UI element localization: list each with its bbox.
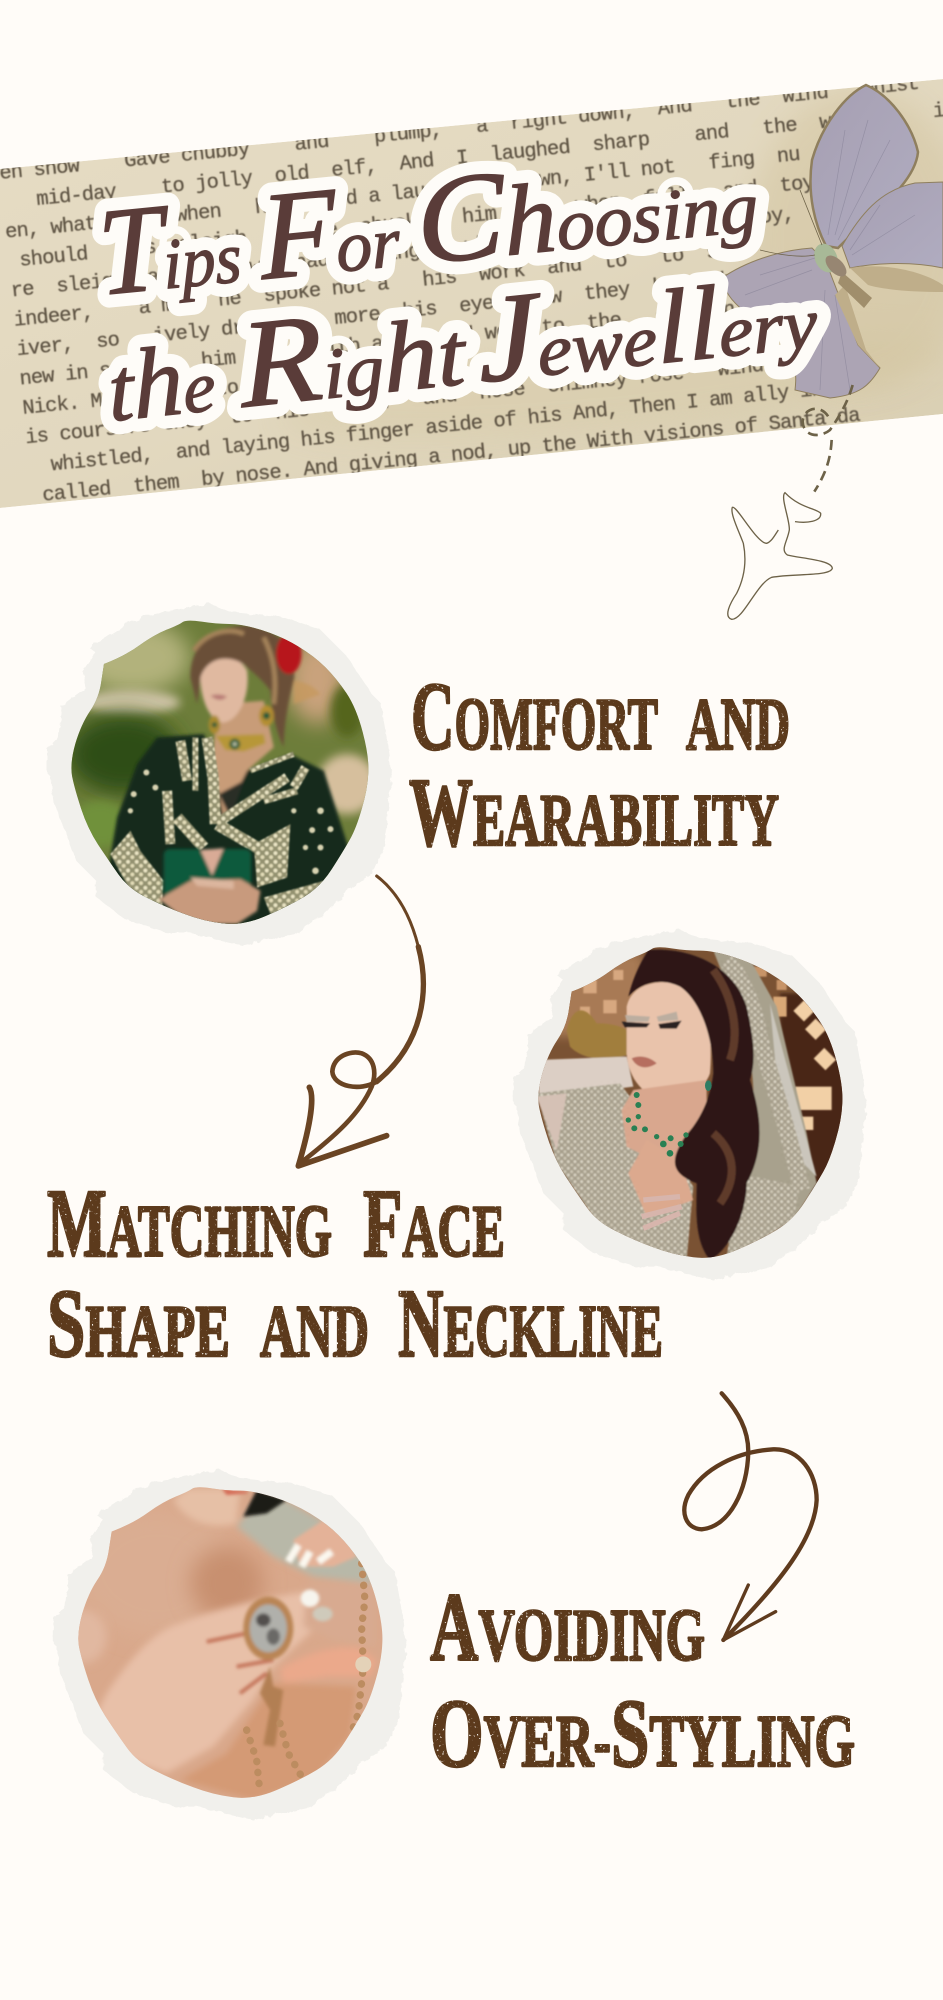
title white sticker halo [95, 120, 820, 449]
typewriter text on paper: en, what to when him, and a laugh of brown, I'll not fing nu the [4, 138, 858, 245]
heading line 2 [47, 1270, 663, 1378]
title lettering: Choosing [413, 120, 760, 292]
icon: butterfly [722, 85, 943, 398]
heading line 1: FACE [363, 1170, 505, 1278]
heading: matching face shape and neckline [47, 1170, 663, 1378]
heading line 2: SHAPE [47, 1270, 230, 1378]
title white sticker halo: Jewellery [474, 237, 820, 410]
typewriter text on paper: called them by nose. And giving a nod, up the With visions of Santa da [30, 405, 861, 509]
typewriter text on paper: should his sleigh of he chuckle him to when fill and toy, [7, 171, 826, 274]
title white sticker halo: Right [235, 273, 470, 435]
typewriter text on paper: is coursers they to his flew and nose chimney rose wind ly [24, 350, 810, 450]
heading line 2: AND [260, 1291, 369, 1373]
typewriter text on paper: new in s he him dry with a x, And went to the ally in [19, 298, 736, 391]
typewriter text on paper: en snow Gave chubby and plump, a right down, And the wind whist [0, 73, 920, 186]
title lettering: Right [235, 273, 470, 435]
panel: avoiding over-styling [40, 1460, 855, 1830]
typewriter text on paper: iver, so ively dre his more his eyes how they ke a by [16, 268, 745, 362]
banner: vintage typewriter paper strip [0, 69, 943, 509]
arrow: from comfort to face shape [298, 876, 423, 1166]
title white sticker halo: Tips [95, 171, 244, 323]
title white sticker halo: Choosing [413, 120, 760, 292]
title lettering: For [256, 155, 403, 307]
title lettering: Tips [95, 171, 244, 323]
heading line 1: AVOIDING [430, 1574, 705, 1682]
photo: bride with emerald necklace [512, 928, 868, 1280]
typewriter text on paper: mid-day to jolly old elf, And I laughed sharp and the wings ies [1, 98, 943, 215]
title lettering: Jewellery [474, 237, 820, 410]
panel: comfort and wearability [30, 591, 790, 961]
photo: woman in green with gold choker [46, 602, 393, 946]
heading: avoiding over-styling [430, 1574, 855, 1788]
heading line 1: COMFORT [411, 663, 658, 771]
arrow: from face shape to over-styling [684, 1393, 817, 1640]
typewriter text on paper [0, 69, 943, 509]
heading line 2: OVER-STYLING [430, 1680, 855, 1788]
title white sticker halo: For [256, 155, 403, 307]
typewriter text on paper: Nick. Mo they to the with a fox, And went Then I am rich [21, 325, 773, 421]
heading line 1: AND [686, 684, 790, 766]
heading: comfort and wearability [409, 663, 790, 867]
heading line 1: MATCHING [47, 1170, 332, 1278]
title lettering [95, 120, 820, 449]
icon: paper plane with dashed trail [728, 385, 853, 619]
title [95, 120, 820, 449]
typewriter text on paper: re sleig a me know I had nothing to when heart stocking boy, his [10, 198, 852, 303]
title lettering: the [105, 321, 218, 443]
typewriter text on paper: indeer, a me he spoke not a his work and to to sle [13, 239, 741, 333]
title white sticker halo: the [105, 321, 218, 443]
photo: hands holding gold rosary medallion [52, 1468, 408, 1820]
heading line 2: WEARABILITY [409, 759, 779, 867]
panel: matching face shape and neckline [47, 920, 900, 1378]
typewriter text on paper: whistled, and laying his finger aside of his And, Then I am ally in [27, 379, 824, 480]
heading line 2: NECKLINE [398, 1270, 663, 1378]
